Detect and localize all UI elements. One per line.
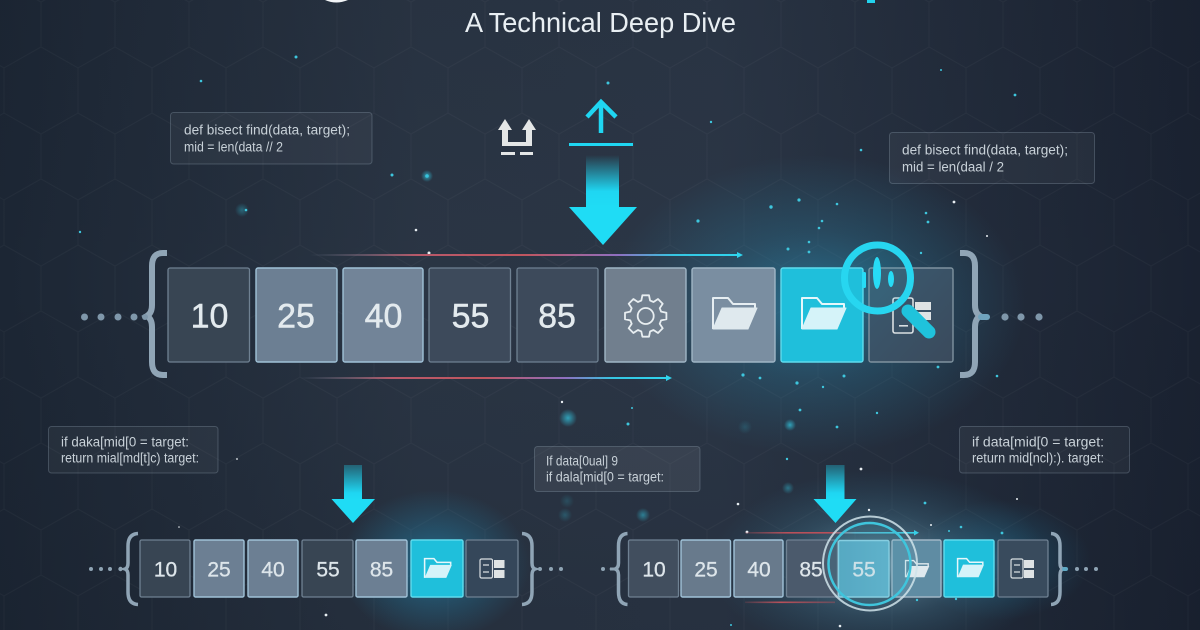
cell 40: 40	[747, 558, 771, 582]
cell 55: 55	[452, 298, 489, 336]
icon: folder	[906, 561, 929, 577]
code snippet: lower left: return mial[md[t]c) target:	[61, 450, 199, 466]
cell 25	[681, 540, 730, 597]
cell gear	[605, 268, 686, 362]
left bracket with dots	[81, 253, 167, 375]
cell 55 highlighted: 55	[852, 558, 876, 582]
lower left array row	[89, 534, 563, 604]
cell highlighted folder	[411, 540, 463, 597]
icon: document grid	[893, 298, 931, 333]
cell 55	[429, 268, 510, 362]
icon: magnifier	[844, 245, 929, 332]
cell 10	[140, 540, 190, 597]
right bracket with dots	[1051, 534, 1098, 604]
cell highlighted folder	[781, 268, 863, 362]
cell 10: 10	[191, 298, 228, 336]
code snippet: lower centre: if dala[mid[0 = target:	[546, 470, 664, 484]
cell 25: 25	[277, 298, 315, 336]
cell 40	[248, 540, 298, 597]
code snippet: lower right: return mid[ncl):). target:	[972, 450, 1104, 466]
arrow: top sweep line	[310, 252, 743, 258]
lower right sweep lines	[745, 530, 919, 603]
icon: focus rings	[823, 516, 917, 610]
icon: document grid	[1011, 559, 1034, 578]
cell 25: 25	[207, 558, 231, 582]
particles	[79, 56, 1018, 627]
code snippet: lower centre: If data[0ual] 9	[546, 454, 618, 468]
cell 25	[194, 540, 244, 597]
cell 85: 85	[538, 298, 576, 336]
lower right array row	[601, 534, 1098, 604]
cell 85	[517, 268, 598, 362]
cell 10: 10	[154, 558, 177, 582]
cell 10	[168, 268, 250, 362]
cell 40	[343, 268, 423, 362]
cell 25: 25	[694, 558, 718, 582]
cell 55: 55	[316, 558, 340, 582]
icon: gear	[625, 295, 666, 337]
cell 40	[734, 540, 783, 597]
cell 10: 10	[642, 558, 666, 582]
icon: folder	[958, 559, 984, 577]
cell folder	[892, 540, 941, 597]
cell 55 highlighted	[838, 540, 889, 597]
cell 40: 40	[261, 558, 285, 582]
arrow: bottom sweep line	[300, 375, 672, 381]
cell 85	[356, 540, 407, 597]
arrow: lower left down arrow	[332, 465, 375, 523]
code snippet: top left: mid = len(data // 2	[184, 140, 283, 154]
code snippet: top right: mid = len(daal / 2	[902, 160, 1004, 174]
icon: document grid	[480, 559, 504, 578]
left bracket with dots	[89, 534, 138, 604]
code snippet: lower centre	[534, 446, 700, 492]
icon: folder	[425, 559, 452, 578]
code snippet: lower right: if data[mid[0 = target:	[972, 434, 1104, 450]
arrow: lower right down arrow	[814, 465, 856, 523]
right bracket with dots	[522, 534, 563, 604]
cell 25	[256, 268, 337, 362]
left bracket with dots	[601, 534, 628, 604]
cell document	[869, 268, 953, 362]
title remnants cropped at top edge	[325, 0, 875, 3]
code snippet: top right: def bisect find(data, target);	[902, 142, 1068, 158]
code snippet: top left	[170, 112, 372, 164]
cell document	[466, 540, 518, 597]
cell folder	[692, 268, 775, 362]
code snippet: top right	[890, 132, 1094, 184]
code snippet: top left: def bisect find(data, target);	[184, 122, 350, 138]
code snippet: lower right	[960, 426, 1130, 473]
cell highlighted folder	[944, 540, 994, 597]
icon: white double up arrows	[498, 119, 536, 155]
cell 40: 40	[365, 298, 402, 336]
icon: cyan up arrow over bar	[569, 102, 633, 144]
cell 85	[786, 540, 838, 597]
right bracket with dots	[960, 253, 1043, 375]
cell 85: 85	[799, 558, 823, 582]
icon: folder	[713, 298, 757, 329]
main array row	[81, 253, 1043, 375]
cell 55	[302, 540, 353, 597]
code snippet: lower left: if daka[mid[0 = target:	[61, 434, 189, 450]
arrow: main down arrow	[569, 155, 637, 245]
cell document	[998, 540, 1048, 597]
code snippet: lower left	[48, 426, 218, 473]
cell 85: 85	[370, 558, 393, 582]
cell 10	[628, 540, 678, 597]
icon: folder highlighted	[802, 298, 846, 329]
subtitle: A Technical Deep Dive	[465, 7, 736, 38]
